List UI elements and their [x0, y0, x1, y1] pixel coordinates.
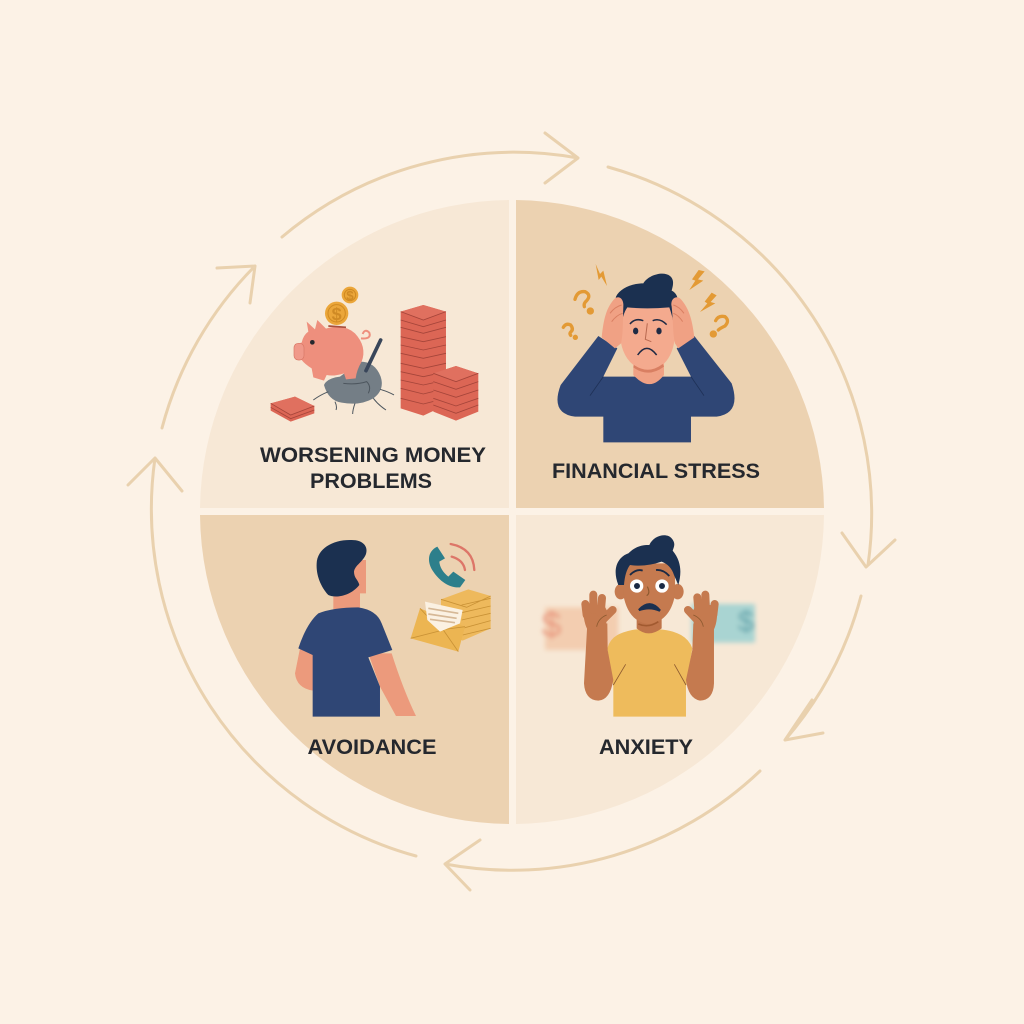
panel: worsening money problems: [200, 200, 509, 508]
arrow: bottom: [445, 771, 760, 890]
icon: telephone and ringing waves: [429, 544, 474, 587]
figure: hair: [615, 274, 678, 328]
cycle arrows: [128, 133, 895, 890]
icon: cracked rock and chisel: [313, 340, 394, 414]
panel: avoidance: [200, 515, 509, 824]
figure: arms and raised hands: [583, 605, 717, 701]
label: worsening money problems: PROBLEMS: [310, 469, 432, 493]
figure: shirt: [298, 607, 392, 717]
arrow: lower left: [128, 458, 416, 856]
arrow: lower right: [785, 596, 861, 740]
figure: hands: [602, 297, 694, 348]
illustration: piggy bank, rock and money stacks: [271, 287, 478, 422]
illustration: anxious man with raised hands: [542, 535, 755, 717]
icon: question marks and lightning: [563, 292, 727, 338]
panel: financial stress: [516, 200, 824, 508]
icon: money stacks: [271, 305, 478, 422]
icon: coins: $: [332, 304, 342, 324]
figure: neck and face: [620, 307, 675, 384]
figure: head: [615, 563, 684, 633]
label: financial stress: FINANCIAL STRESS: [552, 459, 760, 483]
icon: blurred bills: $: [542, 606, 561, 645]
icon: piggy bank: [294, 320, 370, 381]
figure: torso and arms: [557, 336, 735, 442]
label: worsening money problems: [260, 443, 486, 493]
icon: blurred bills: $: [738, 606, 755, 639]
label: avoidance: AVOIDANCE: [308, 735, 436, 759]
panel: anxiety: [516, 515, 824, 824]
arrow: upper left: [162, 266, 255, 428]
arrow: right: [608, 167, 895, 567]
arrow: top: [282, 133, 578, 237]
illustration: stressed man holding his head: [557, 264, 735, 442]
figure: shirt: [607, 629, 692, 717]
icon: envelopes and letter: [411, 589, 491, 652]
icon: coins: [325, 287, 358, 325]
icon: blurred bills: [542, 604, 755, 650]
figure: hair: [616, 535, 680, 585]
illustration: man turning away from bills and calls: [295, 540, 491, 717]
figure: hair: [317, 540, 367, 597]
figure: arm and neck: [295, 560, 416, 716]
label: anxiety: ANXIETY: [599, 735, 693, 759]
icon: coins: $: [346, 288, 354, 303]
label: worsening money problems: WORSENING MONEY: [260, 443, 486, 467]
